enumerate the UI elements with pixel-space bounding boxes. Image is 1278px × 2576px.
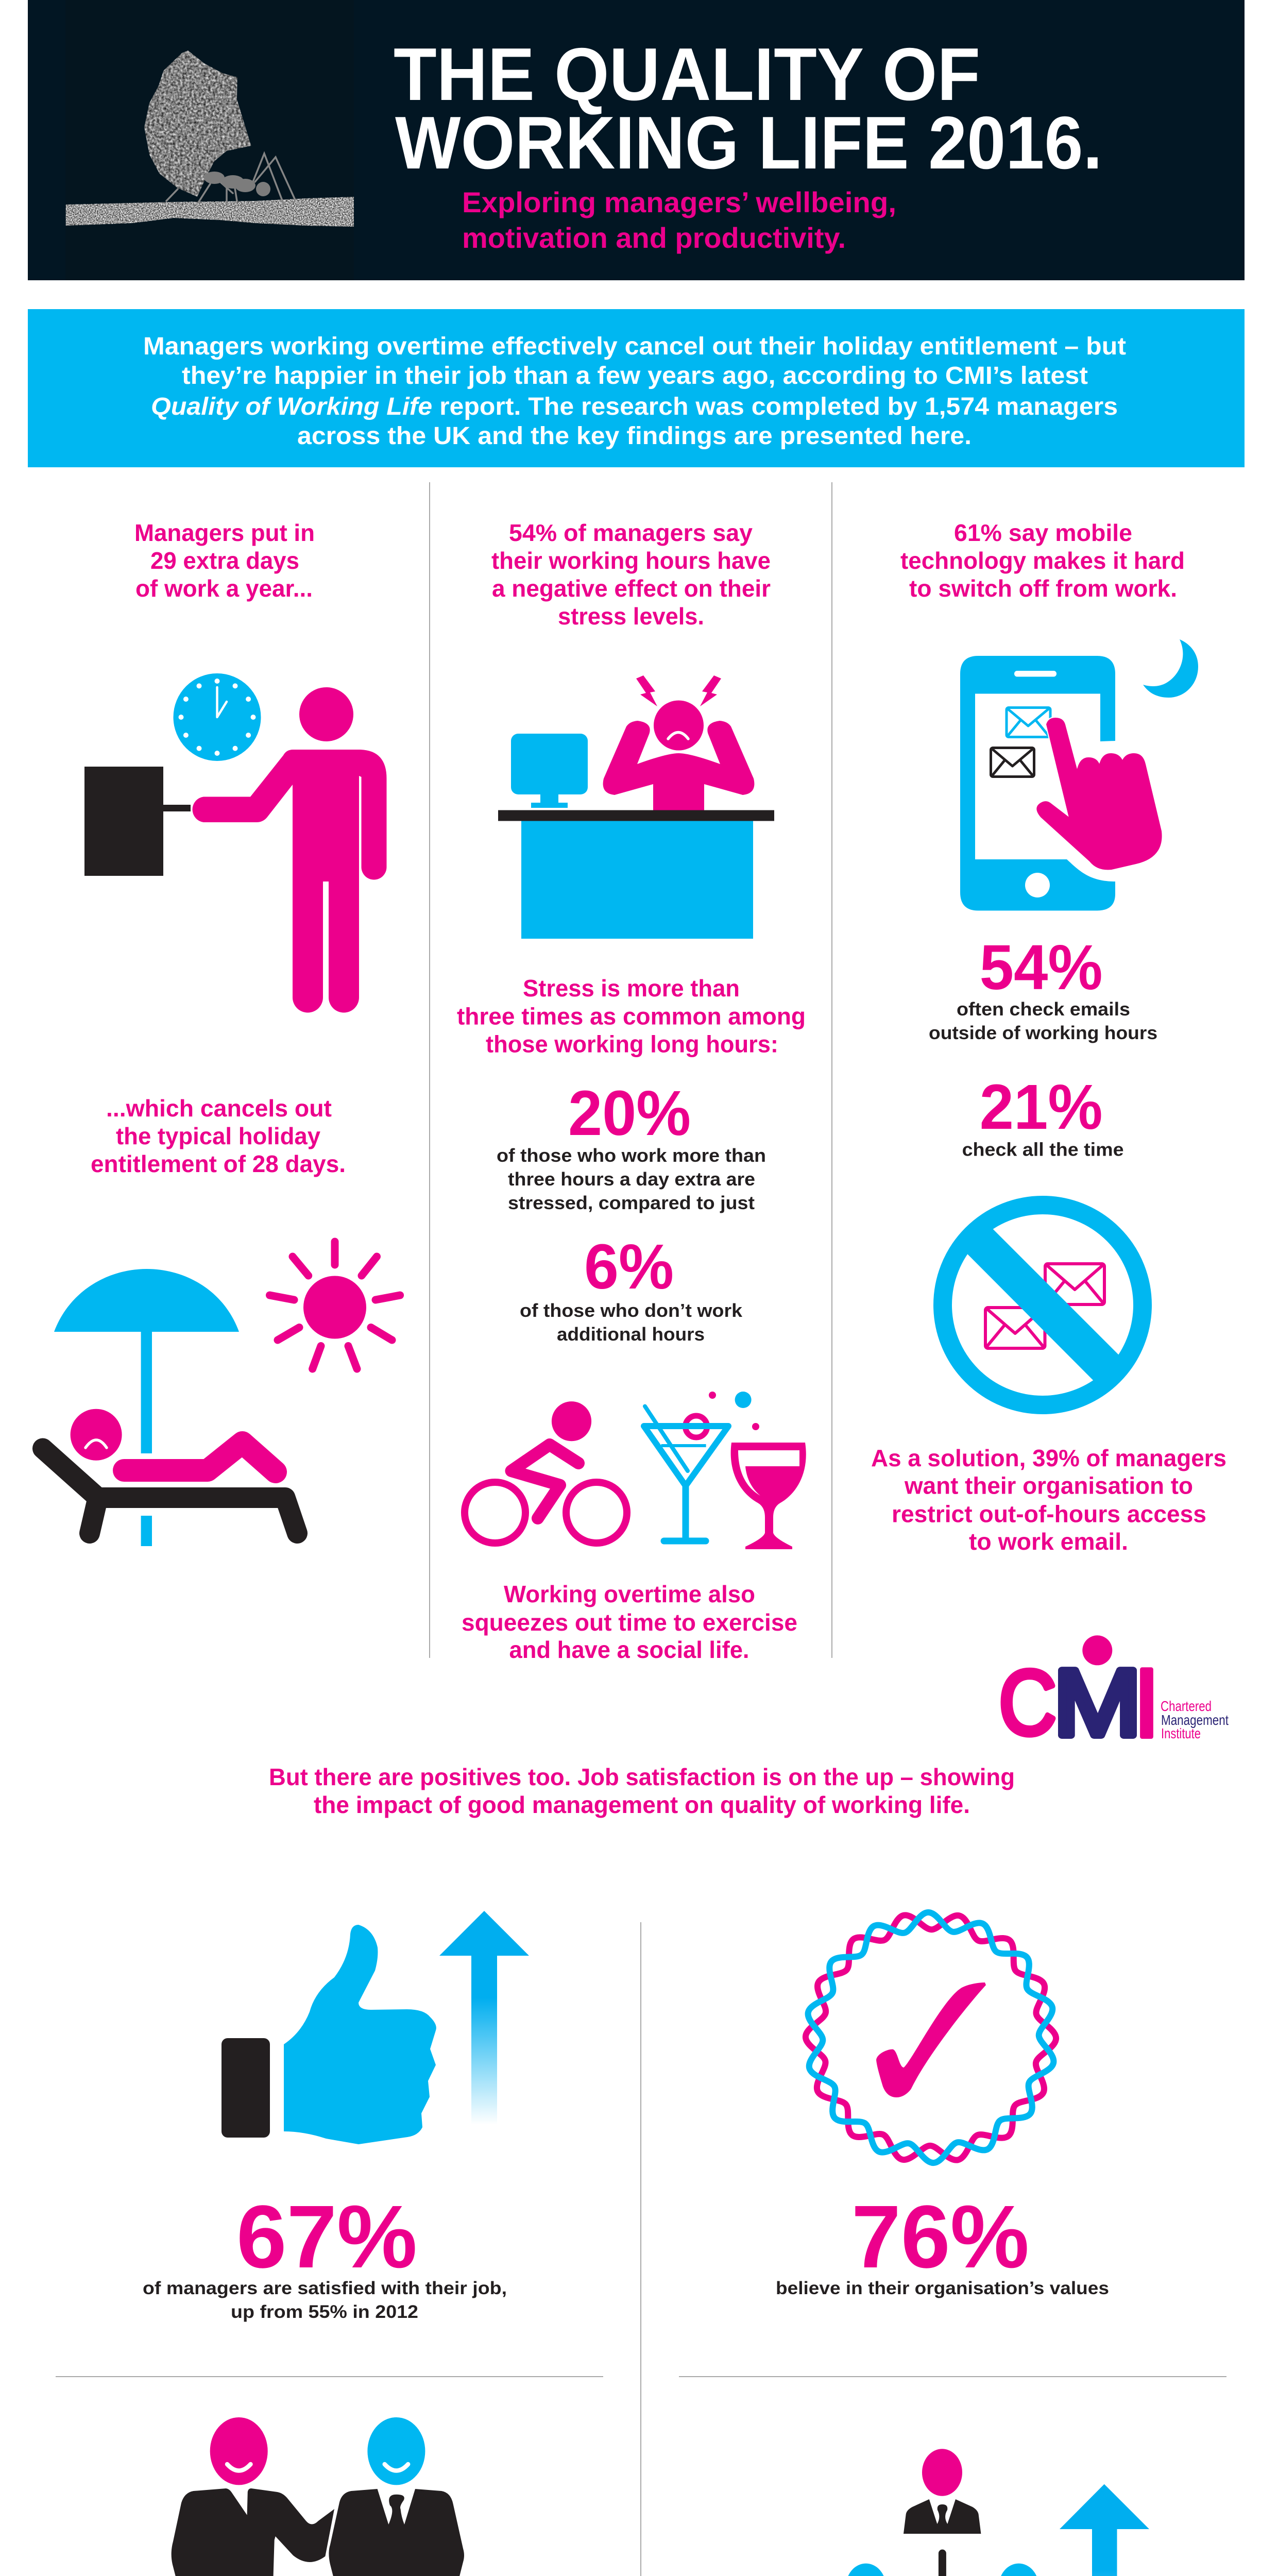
text: holiday entitlement: ...which cancels out bbox=[106, 1095, 332, 1122]
subtitle bbox=[462, 186, 896, 254]
heading: negative effect on stress: 54% of managers say bbox=[509, 519, 753, 546]
stat: 54%: outside of working hours bbox=[929, 1022, 1157, 1043]
icon: team of three bbox=[827, 2449, 1058, 2576]
intro text: they’re happier in their job than a few years ago, according to CMI’s latest bbox=[182, 362, 1088, 389]
CMI logo: Chartered bbox=[1161, 1698, 1212, 1714]
icon: wine glass bbox=[731, 1443, 806, 1549]
heading: 29 extra days: of work a year... bbox=[135, 575, 313, 602]
stat: 54%: 54% bbox=[980, 933, 1103, 1003]
panel: fair treatment bbox=[780, 2449, 1149, 2576]
stat: 76%: 76% bbox=[851, 2187, 1029, 2286]
icon: cocktail glass bbox=[644, 1406, 728, 1541]
text: restrict out-of-hours access: As a solution, 39% of managers bbox=[871, 1445, 1226, 1471]
heading: negative effect on stress: a negative effect on their bbox=[492, 575, 771, 602]
text: holiday entitlement: the typical holiday bbox=[116, 1123, 320, 1149]
CMI logo bbox=[999, 1635, 1229, 1758]
stat: 6%: additional hours bbox=[557, 1324, 705, 1345]
icon: stressed manager at desk bbox=[498, 675, 774, 939]
CMI logo: Institute bbox=[1161, 1725, 1201, 1741]
heading: stress three times as common: three times as common among bbox=[457, 1003, 806, 1029]
intro text bbox=[143, 333, 1126, 450]
stat: 67%: of managers are satisfied with their job, bbox=[143, 2278, 507, 2298]
text: restrict out-of-hours access: to work email. bbox=[969, 1528, 1128, 1555]
heading: 29 extra days bbox=[134, 519, 315, 602]
text: exercise and social life: Working overtime also bbox=[504, 1581, 755, 1607]
icon: two smiling businessmen bbox=[172, 2417, 464, 2576]
heading: positives bbox=[269, 1764, 1015, 1818]
CMI logo: M bbox=[1053, 1650, 1141, 1755]
heading: mobile technology: to switch off from work. bbox=[909, 575, 1177, 602]
stat: 76%: believe in their organisation’s values bbox=[776, 2278, 1109, 2298]
column: stress bbox=[457, 519, 806, 1663]
photo: leaf-cutter ant carrying leaf bbox=[65, 0, 354, 280]
stat: 20%: of those who work more than bbox=[497, 1145, 766, 1166]
text: restrict out-of-hours access bbox=[871, 1445, 1226, 1555]
icon: phone with emails and pointing hand bbox=[960, 656, 1163, 911]
panel: trust bbox=[172, 2417, 464, 2576]
stat: 67% bbox=[143, 2187, 507, 2322]
heading: 29 extra days: Managers put in bbox=[134, 519, 315, 546]
CMI logo: C bbox=[999, 1651, 1057, 1754]
heading: mobile technology: technology makes it hard bbox=[900, 547, 1185, 574]
icon: badge with tick bbox=[791, 1900, 1070, 2175]
text: exercise and social life: and have a social life. bbox=[509, 1636, 749, 1663]
intro text: Quality of Working Life report. The research was completed by 1,574 managers bbox=[151, 393, 1118, 420]
stat: 67%: 67% bbox=[236, 2187, 417, 2286]
icon: person clocking in bbox=[84, 673, 386, 1013]
heading: negative effect on stress: stress levels. bbox=[558, 603, 704, 630]
stat: 20%: three hours a day extra are bbox=[508, 1168, 755, 1190]
title: THE QUALITY OF bbox=[394, 32, 980, 116]
icon: thumbs up bbox=[221, 1925, 436, 2144]
heading: mobile technology bbox=[900, 519, 1185, 602]
stat: 21%: check all the time bbox=[962, 1139, 1124, 1160]
intro text: Managers working overtime effectively cancel out their holiday entitlement – but bbox=[143, 333, 1126, 360]
text: holiday entitlement bbox=[91, 1095, 346, 1177]
text: exercise and social life: squeezes out time to exercise bbox=[462, 1609, 797, 1636]
panel: organisation's values bbox=[776, 1900, 1109, 2298]
subtitle: motivation and productivity. bbox=[462, 222, 846, 254]
stat: 21% bbox=[962, 1072, 1124, 1160]
intro panel bbox=[28, 309, 1245, 467]
panel: job satisfaction bbox=[143, 1911, 529, 2322]
heading: 29 extra days: 29 extra days bbox=[150, 547, 299, 574]
icon: moon bbox=[1143, 639, 1198, 698]
arrow: up bbox=[439, 1911, 529, 2125]
icon: sun bbox=[270, 1242, 400, 1369]
arrow: up bbox=[1060, 2484, 1149, 2576]
heading: negative effect on stress bbox=[491, 519, 771, 630]
icon: bubbles bbox=[709, 1392, 759, 1430]
intro text: across the UK and the key findings are presented here. bbox=[297, 422, 972, 450]
stat: 20%: 20% bbox=[568, 1078, 691, 1149]
heading: positives: the impact of good management on quality of working life. bbox=[314, 1791, 970, 1818]
title bbox=[394, 32, 1102, 184]
CMI logo: Management bbox=[1161, 1712, 1229, 1728]
text: restrict out-of-hours access: restrict out-of-hours access bbox=[892, 1500, 1206, 1527]
heading: stress three times as common: Stress is more than bbox=[523, 975, 740, 1002]
icon: sad manager on sun lounger under umbrella bbox=[43, 1269, 297, 1546]
stat: 67%: up from 55% in 2012 bbox=[231, 2302, 418, 2322]
column: overtime and holidays bbox=[43, 519, 400, 1546]
icon: no email sign bbox=[943, 1205, 1143, 1405]
text: restrict out-of-hours access: want their organisation to bbox=[904, 1472, 1193, 1499]
stat: 76% bbox=[776, 2187, 1109, 2298]
stat: 20% bbox=[497, 1078, 766, 1213]
heading: mobile technology: 61% say mobile bbox=[954, 519, 1132, 546]
stat: 54% bbox=[929, 933, 1157, 1043]
column: mobile technology bbox=[871, 519, 1226, 1555]
heading: stress three times as common: those working long hours: bbox=[486, 1030, 778, 1057]
header panel bbox=[28, 0, 1245, 280]
heading: stress three times as common bbox=[457, 975, 806, 1057]
title: WORKING LIFE 2016. bbox=[395, 101, 1102, 184]
stat: 20%: stressed, compared to just bbox=[508, 1192, 755, 1213]
heading: positives: But there are positives too. Job satisfaction is on the up – showing bbox=[269, 1764, 1015, 1790]
stat: 6% bbox=[520, 1232, 743, 1345]
subtitle: Exploring managers’ wellbeing, bbox=[462, 186, 896, 218]
CMI logo: I bbox=[1133, 1649, 1160, 1758]
stat: 6%: 6% bbox=[584, 1232, 674, 1302]
text: holiday entitlement: entitlement of 28 days. bbox=[91, 1150, 346, 1177]
heading: negative effect on stress: their working hours have bbox=[491, 547, 771, 574]
text: exercise and social life bbox=[462, 1581, 797, 1663]
stat: 54%: often check emails bbox=[957, 998, 1130, 1020]
stat: 6%: of those who don’t work bbox=[520, 1300, 743, 1321]
icon: cyclist bbox=[465, 1401, 627, 1543]
stat: 21%: 21% bbox=[980, 1072, 1103, 1143]
